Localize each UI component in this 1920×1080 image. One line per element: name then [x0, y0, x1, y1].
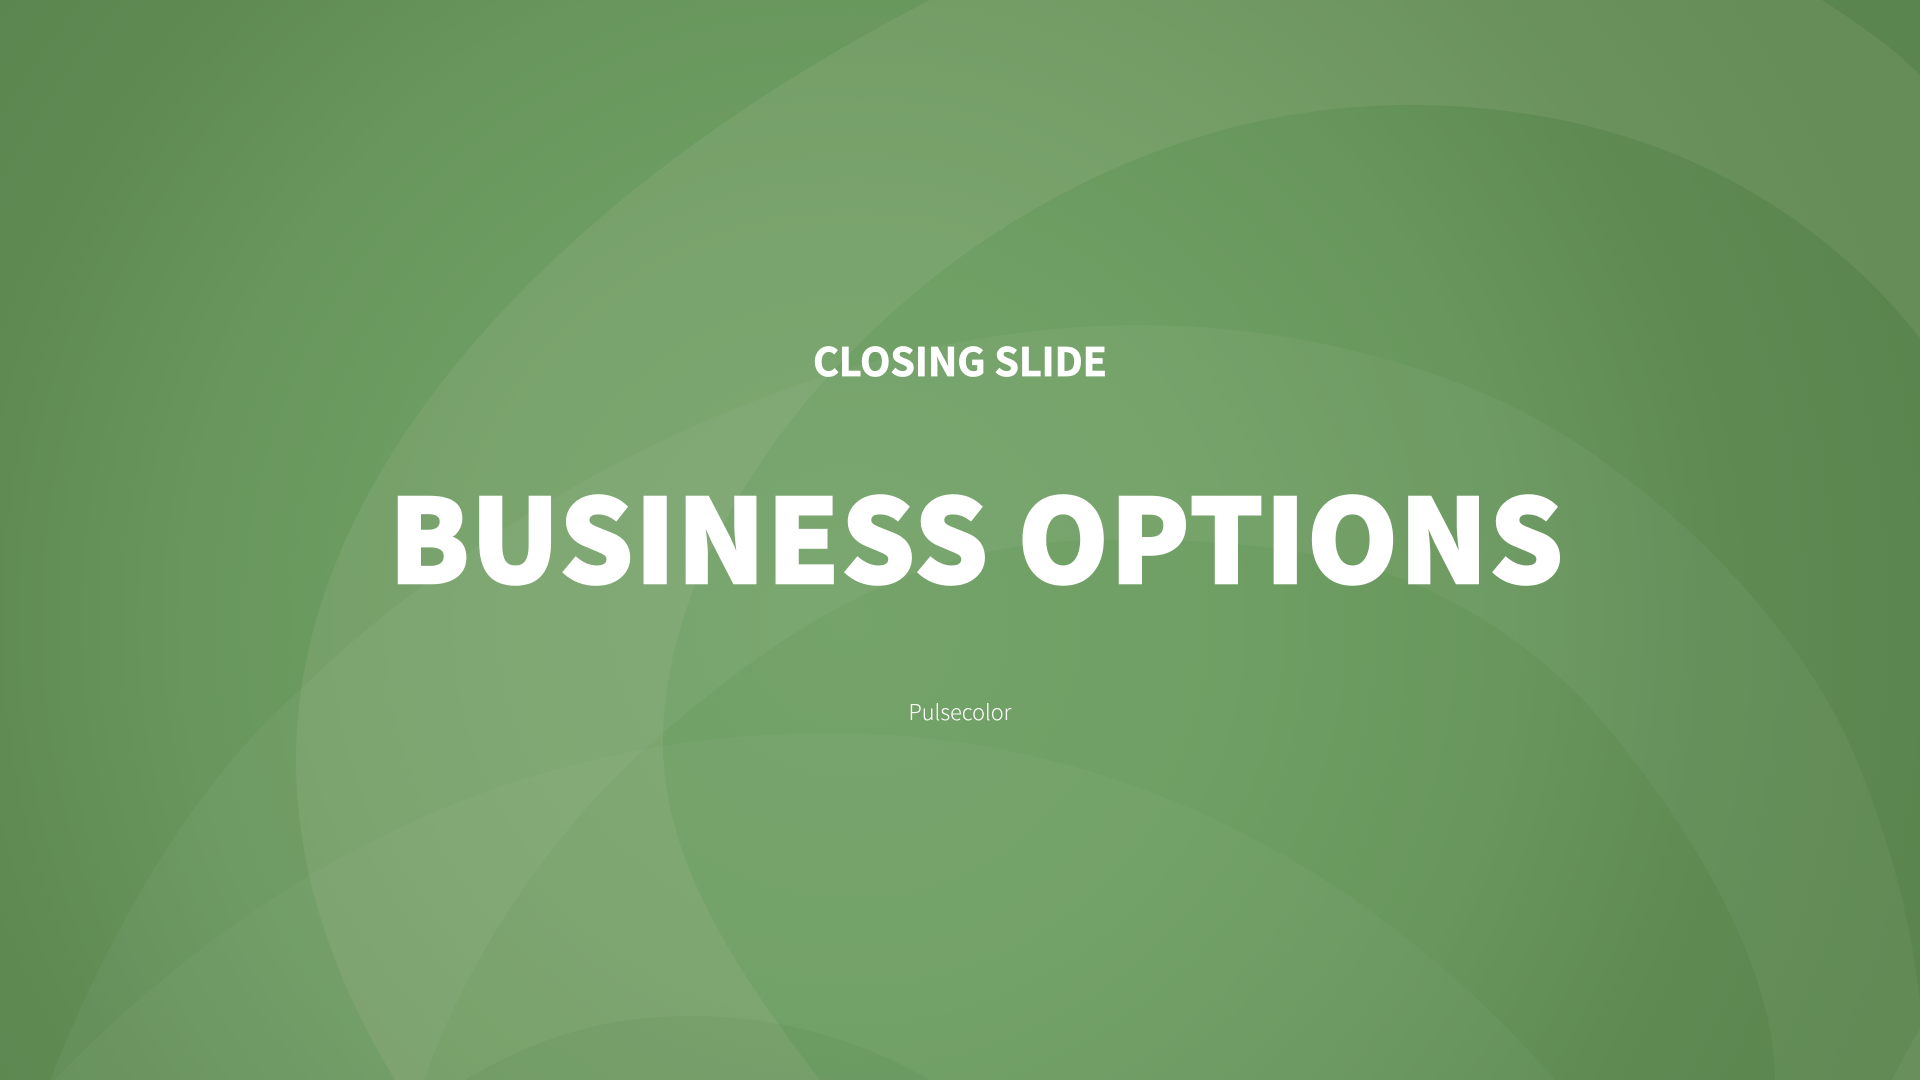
kicker heading: CLOSING SLIDE [813, 331, 1107, 388]
lower ring: second light swoosh [50, 325, 1920, 1080]
small dark bottom ellipse [465, 1016, 930, 1080]
main title: BUSINESS OPTIONS [389, 450, 1565, 617]
lower light ellipse [54, 733, 1555, 1080]
bottom right corner accent [1892, 1029, 1920, 1080]
author: Pulsecolor [908, 696, 1011, 727]
